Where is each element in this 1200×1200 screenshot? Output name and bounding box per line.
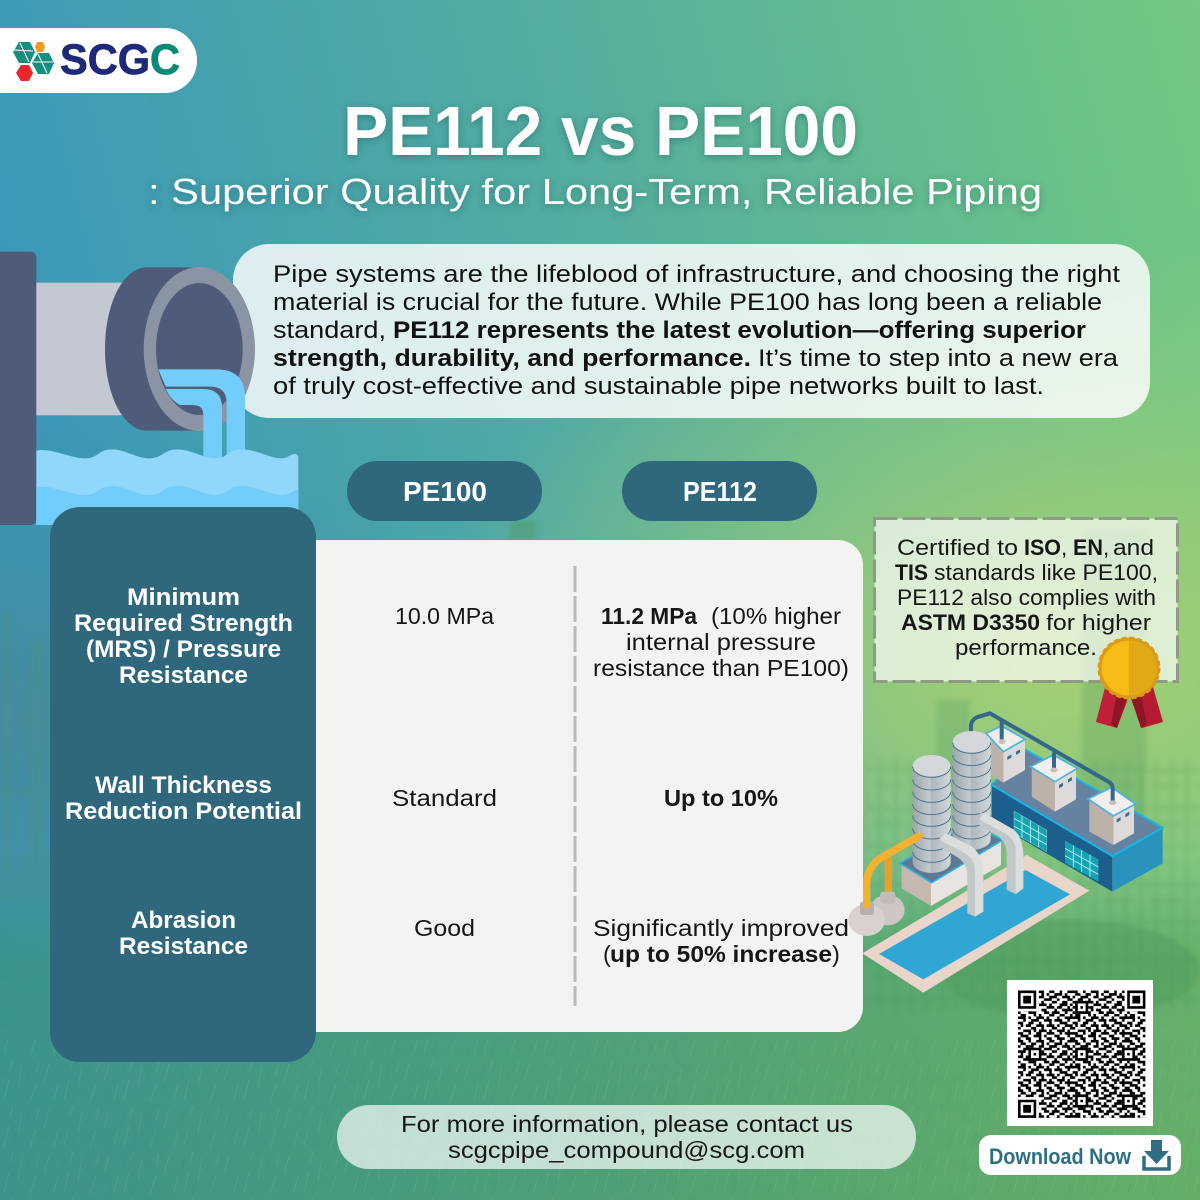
certification text: TIS (895, 560, 928, 585)
row label: MRS: Minimum (127, 584, 240, 611)
PE100 values: Standard (392, 785, 497, 811)
certification text: , (1061, 535, 1067, 560)
grey outflow pipes (939, 812, 1023, 917)
logo badge (0, 28, 197, 93)
PE100 values (392, 603, 497, 941)
PE112 values: Up to 10% (664, 785, 778, 811)
row label: MRS: (MRS) / Pressure (86, 636, 281, 663)
roof boxes (986, 726, 1135, 845)
contact panel (337, 1105, 916, 1169)
certification text (895, 535, 1158, 660)
PE112 values: ( (603, 941, 611, 967)
row label: MRS: Resistance (119, 662, 248, 689)
certification text: ASTM D3350 (901, 610, 1040, 635)
subtitle: : Superior Quality for Long-Term, Reliable Piping (148, 171, 1042, 212)
PE112 values: resistance than PE100) (593, 655, 849, 681)
icon: medal with ribbon (1096, 638, 1163, 728)
illustration: isometric plant (848, 713, 1163, 993)
column header: PE112: PE112 (683, 476, 757, 507)
intro paragraph: material is crucial for the future. While PE100 has long been a reliable (273, 289, 1102, 316)
intro paragraph (273, 261, 1120, 400)
row label: wall thickness (65, 772, 302, 825)
row labels panel (50, 507, 316, 1062)
row label: wall thickness: Reduction Potential (65, 798, 302, 825)
certification text: Certified to (897, 535, 1018, 560)
column header: PE100: PE100 (403, 476, 487, 507)
intro paragraph: It’s time to step into a new era (758, 345, 1118, 372)
row label: abrasion: Resistance (119, 933, 248, 960)
row label: MRS: Required Strength (74, 610, 293, 637)
certification text: ISO (1024, 535, 1061, 560)
certification text: and (1113, 535, 1154, 560)
column header: PE100 (347, 461, 542, 521)
icon: pipe pouring water (0, 252, 298, 525)
building (971, 713, 1163, 892)
row label: MRS (74, 584, 293, 689)
intro paragraph: strength, durability, and performance. (273, 345, 751, 372)
column header: PE112 (622, 461, 817, 521)
title: PE112 vs PE100 (343, 92, 858, 170)
intro paragraph: PE112 represents the latest evolution—offering superior (393, 317, 1086, 344)
logo wordmark: SCGC (60, 36, 180, 84)
row label: wall thickness: Wall Thickness (95, 772, 272, 799)
tank base (900, 823, 1003, 906)
intro paragraph: standard, (273, 317, 386, 344)
PE100 values: Good (414, 915, 475, 941)
intro text panel (233, 244, 1150, 418)
intro paragraph: of truly cost-effective and sustainable pipe networks built to last. (273, 373, 1044, 400)
certification text: , (1103, 535, 1109, 560)
PE112 values: ) (832, 941, 840, 967)
certification text: PE112 also complies with (897, 585, 1156, 610)
icon: download (1144, 1140, 1169, 1169)
PE112 values: up to 50% increase (610, 941, 832, 967)
certification text: performance. (955, 635, 1097, 660)
tanks (913, 731, 991, 873)
certification callout (874, 518, 1178, 682)
PE100 values: 10.0 MPa (395, 603, 495, 629)
PE112 values: Significantly improved (593, 915, 849, 941)
certification text: for higher (1046, 610, 1152, 635)
contact panel: scgcpipe_compound@scg.com (448, 1137, 805, 1163)
download button (979, 1135, 1181, 1175)
PE112 values: (10% higher (711, 603, 841, 629)
certification text: standards like PE100, (934, 560, 1158, 585)
row label: abrasion: Abrasion (131, 907, 236, 934)
logo icon: hexagons (13, 42, 54, 81)
contact panel: For more information, please contact us (401, 1111, 853, 1137)
intro paragraph: Pipe systems are the lifeblood of infrastructure, and choosing the right (273, 261, 1120, 288)
PE112 values: internal pressure (626, 629, 816, 655)
water pool (862, 855, 1089, 993)
comparison table body (300, 540, 863, 1032)
row label: abrasion (119, 907, 248, 960)
download button: Download Now (989, 1144, 1132, 1169)
certification text: EN (1073, 535, 1103, 560)
orange pipes and valves (848, 836, 919, 936)
PE112 values: 11.2 MPa (601, 603, 698, 629)
PE112 values (593, 603, 849, 967)
QR code (1007, 980, 1153, 1126)
